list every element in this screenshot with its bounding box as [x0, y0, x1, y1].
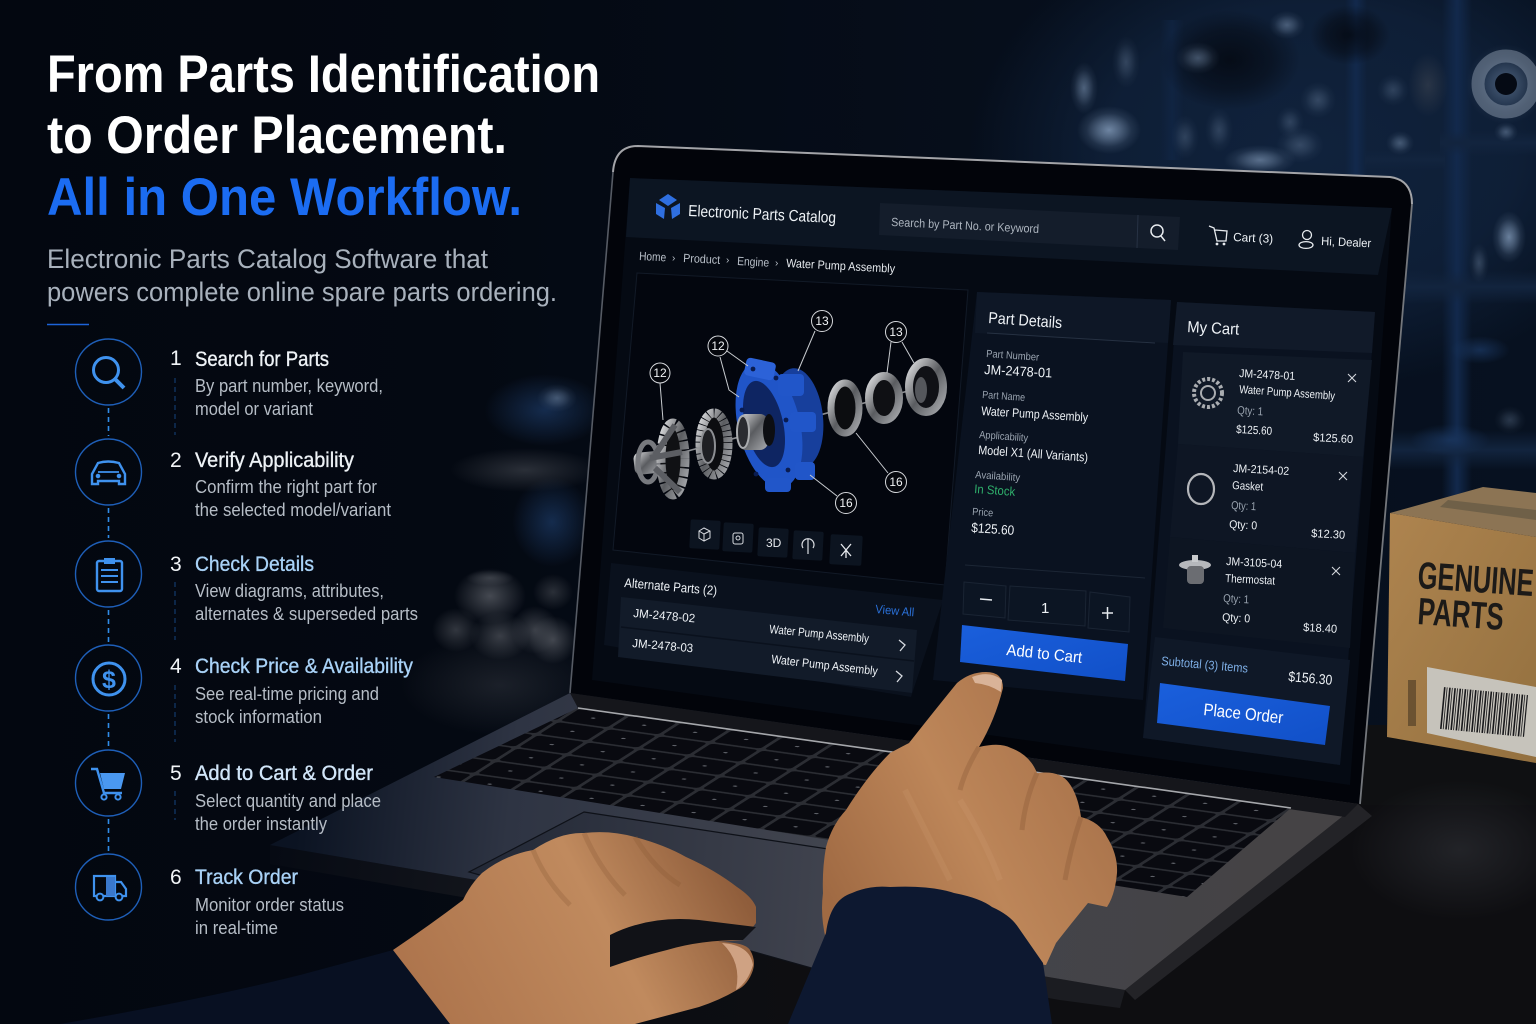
part attributes: Availability	[975, 469, 1021, 484]
step 2: verify applicability	[76, 439, 391, 520]
step 6 text	[170, 866, 344, 938]
panel: alternate parts	[604, 563, 943, 697]
view all link: View All	[875, 602, 915, 619]
trackpad	[469, 812, 1000, 990]
step 1 text: Search for Parts	[195, 348, 329, 371]
panel: alternate parts: Alternate Parts (2)	[624, 575, 718, 598]
panel: my cart	[1143, 302, 1375, 765]
cart subtotal	[1143, 637, 1350, 765]
cart item 3: Thermostat	[1225, 573, 1276, 588]
icon: search	[1151, 225, 1165, 241]
button: add to cart: Add to Cart	[1006, 642, 1083, 667]
app header bar	[626, 178, 1392, 275]
callout numbers	[650, 310, 906, 514]
cart item 2: Qty: 0	[1229, 519, 1257, 532]
part attributes: $125.60	[971, 520, 1015, 538]
step 4 text: Check Price & Availability	[195, 655, 413, 678]
panel: my cart: My Cart	[1187, 319, 1240, 339]
left sleeve	[60, 950, 450, 1024]
centre bearing	[737, 414, 775, 450]
subheading: powers complete online spare parts ordering.	[47, 277, 557, 307]
cart link: Cart (3)	[1233, 230, 1273, 246]
step 2 text: the selected model/variant	[195, 500, 391, 520]
cart item 3: $18.40	[1303, 622, 1337, 636]
step 6 text: 6	[170, 866, 182, 889]
callout numbers: 13	[815, 314, 829, 328]
panel: exploded parts diagram	[613, 273, 968, 585]
cart item 3: Qty: 1	[1223, 593, 1249, 606]
barcode label	[1408, 667, 1536, 757]
step 2 text: 2	[170, 449, 182, 472]
cart item 2: JM-2154-02	[1233, 463, 1289, 478]
cart subtotal: Subtotal (3) Items	[1161, 654, 1249, 676]
icon: dollar	[76, 645, 142, 711]
alternate rows	[618, 597, 917, 693]
diagram toolbar	[689, 519, 863, 566]
cart item 2: Gasket	[1232, 480, 1264, 494]
cart item 1: Water Pump Assembly	[1239, 384, 1336, 403]
cart item 1: Qty: 1	[1237, 405, 1263, 418]
alternate rows: JM-2478-03	[632, 636, 694, 655]
right hand pointing at add to cart	[822, 672, 1117, 965]
step 1 text: By part number, keyword,	[195, 376, 383, 396]
callout numbers: 12	[711, 339, 725, 353]
callout numbers: 13	[889, 325, 903, 339]
step 2 text: Verify Applicability	[195, 449, 354, 472]
blurred spare parts on the table	[432, 568, 577, 664]
step 6 text: Track Order	[195, 866, 298, 889]
subheading: Electronic Parts Catalog Software that	[47, 244, 488, 274]
part attributes: Part Number	[986, 348, 1040, 364]
step 5: add to cart and order	[76, 750, 381, 834]
breadcrumbs: Home	[639, 249, 667, 264]
step 6: track order	[76, 854, 344, 938]
blue pump housing	[724, 356, 828, 494]
step 1 text	[170, 347, 383, 419]
cart link	[1209, 226, 1273, 246]
timeline connectors	[108, 378, 175, 851]
quantity stepper	[963, 582, 1130, 632]
left hand on trackpad	[393, 832, 756, 1024]
breadcrumbs: Engine	[737, 254, 770, 270]
part attributes: Applicability	[979, 429, 1029, 444]
cart item 1: JM-2478-01	[1239, 368, 1295, 383]
icon: cart	[76, 750, 142, 816]
step 4 text: stock information	[195, 707, 322, 727]
cart item 3	[1163, 537, 1355, 648]
breadcrumbs	[639, 249, 895, 276]
right sleeve	[788, 887, 1052, 1024]
step 1 text: 1	[170, 347, 182, 370]
keyboard	[434, 708, 1291, 897]
step 3: check details	[76, 541, 418, 624]
callout lines	[660, 331, 914, 496]
button: add to cart	[960, 625, 1128, 681]
breadcrumbs: Product	[683, 251, 721, 267]
dealer link: Hi, Dealer	[1321, 234, 1371, 250]
dealer link	[1299, 230, 1371, 250]
part attributes	[971, 348, 1089, 538]
step 4 text: See real-time pricing and	[195, 684, 379, 704]
alternate rows: Water Pump Assembly	[769, 622, 870, 646]
icon: car	[76, 439, 142, 505]
step 5 text: 5	[170, 762, 182, 785]
subheading	[47, 244, 557, 307]
headline	[47, 45, 600, 227]
headline: All in One Workflow.	[47, 168, 522, 227]
button: place order	[1157, 683, 1330, 745]
step 5 text: the order instantly	[195, 814, 327, 834]
step 6 text: in real-time	[195, 918, 278, 938]
catalog title: Electronic Parts Catalog	[688, 203, 836, 227]
laptop lid and screen	[570, 146, 1412, 804]
step 1: search for parts	[76, 339, 383, 419]
part attributes: Part Name	[982, 389, 1026, 404]
step 4 text: 4	[170, 655, 182, 678]
second gear	[700, 413, 728, 475]
left gear hub	[633, 423, 685, 495]
part attributes: Model X1 (All Variants)	[978, 443, 1088, 465]
step 5 text: Select quantity and place	[195, 791, 381, 811]
shipping box: genuine parts	[1387, 487, 1536, 763]
step 6 text: Monitor order status	[195, 895, 344, 915]
step 1 text: model or variant	[195, 399, 313, 419]
cart item 2: Qty: 1	[1231, 500, 1256, 513]
part attributes: In Stock	[974, 482, 1016, 499]
step 3 text: alternates & superseded parts	[195, 604, 418, 624]
breadcrumbs: Water Pump Assembly	[786, 256, 895, 276]
step 4 text	[170, 655, 413, 727]
step 3 text: View diagrams, attributes,	[195, 581, 384, 601]
step 3 text	[170, 553, 418, 624]
cart item 2: $12.30	[1311, 528, 1345, 542]
cart item 1: $125.60	[1313, 432, 1353, 446]
cart subtotal: $156.30	[1288, 668, 1333, 688]
part attributes: Price	[972, 506, 994, 519]
laptop	[270, 146, 1412, 1008]
breadcrumbs: ›	[726, 255, 729, 266]
part attributes: Water Pump Assembly	[981, 404, 1089, 425]
icon: clipboard	[76, 541, 142, 607]
right rings	[831, 362, 943, 433]
cart item 1	[1178, 352, 1372, 457]
search field: Search by Part No. or Keyword	[891, 215, 1039, 236]
step 2 text	[170, 449, 391, 520]
step 2 text: Confirm the right part for	[195, 477, 377, 497]
step 5 text: Add to Cart & Order	[195, 762, 373, 785]
part attributes: JM-2478-01	[984, 362, 1053, 381]
step 5 text	[170, 762, 381, 834]
search field	[879, 203, 1180, 250]
laptop base	[270, 693, 1372, 1008]
shaft	[640, 385, 930, 464]
catalog logo	[656, 194, 680, 219]
step 4: check price and availability	[76, 645, 413, 727]
icon: truck	[76, 854, 142, 920]
callout numbers: 12	[653, 366, 667, 380]
cart item 2	[1170, 444, 1363, 553]
step 3 text: 3	[170, 553, 182, 576]
breadcrumbs: ›	[672, 253, 675, 264]
headline: From Parts Identification	[47, 45, 600, 104]
alternate rows: Water Pump Assembly	[771, 652, 879, 678]
panel: part details: Part Details	[988, 310, 1063, 332]
diagram toolbar: 3D	[766, 536, 782, 550]
callout numbers: 16	[889, 475, 903, 489]
quantity stepper: 1	[1041, 600, 1049, 617]
panel: part details	[933, 292, 1171, 700]
icon: dollar: $	[102, 666, 116, 694]
button: place order: Place Order	[1203, 700, 1284, 727]
icon: magnifier	[76, 339, 142, 405]
cart item 3: JM-3105-04	[1226, 556, 1283, 571]
cart item 1: $125.60	[1236, 424, 1272, 438]
callout numbers: 16	[839, 496, 853, 510]
alternate rows: JM-2478-02	[633, 606, 696, 625]
cart item 3: Qty: 0	[1222, 612, 1250, 625]
headline: to Order Placement.	[47, 106, 507, 165]
step 3 text: Check Details	[195, 553, 314, 576]
breadcrumbs: ›	[775, 258, 778, 269]
